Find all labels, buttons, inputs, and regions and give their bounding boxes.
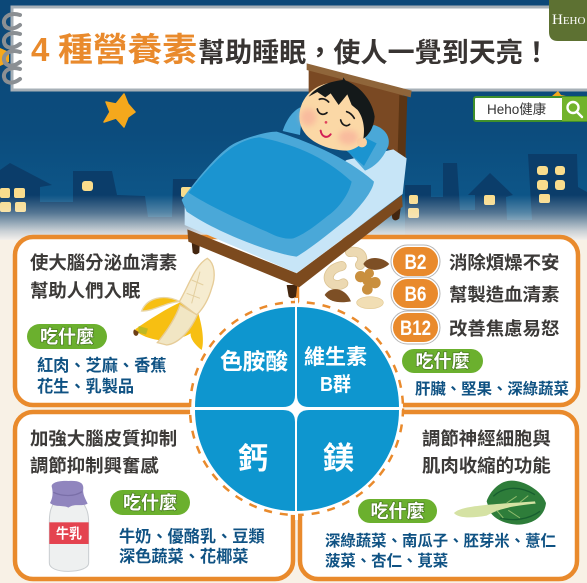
icon: milk bottle: 牛乳 <box>56 526 82 542</box>
B6 row: 幫製造血清素 <box>449 284 559 305</box>
title banner: 種營養素 <box>58 31 197 68</box>
foods: 肝臟、堅果、深綠蔬菜 <box>415 379 569 398</box>
B12 row <box>391 311 559 344</box>
search box <box>474 97 587 121</box>
white backing with dashed ring <box>190 302 403 515</box>
title text dark: 幫助睡眠，使人一覺到天亮！ <box>198 38 550 68</box>
B12 row: 改善焦慮易怒 <box>449 318 559 339</box>
title banner <box>0 7 587 90</box>
bed legs <box>191 208 401 298</box>
B12 row: B12 <box>400 317 431 340</box>
lit windows <box>0 166 565 218</box>
skyline buildings <box>0 154 587 240</box>
panel: tryptophan <box>15 237 305 405</box>
search label: Heho健康 <box>487 101 546 117</box>
foods: 深綠蔬菜、南瓜子、胚芽米、薏仁 <box>325 531 556 550</box>
night sky with skyline <box>0 0 587 240</box>
what to eat pill <box>110 490 190 515</box>
quadrant: calcium <box>195 410 295 511</box>
what to eat pill: 吃什麼 <box>123 492 177 513</box>
eyes and mouth <box>317 99 354 126</box>
panel: tryptophan: 花生、乳製品 <box>37 377 134 396</box>
cheeks <box>300 109 358 145</box>
logo badge: Heho <box>552 12 585 28</box>
quadrant: tryptophan <box>195 307 295 407</box>
panel: magnesium: 肌肉收縮的功能 <box>422 455 551 476</box>
peanut <box>357 297 383 309</box>
what to eat pill <box>402 349 483 373</box>
icon: magnifier <box>568 102 582 117</box>
icon: nuts <box>325 252 389 309</box>
notebook rings <box>4 14 20 83</box>
what to eat pill <box>358 499 437 523</box>
what to eat pill <box>27 324 107 349</box>
panel: magnesium: 菠菜、杏仁、莧菜 <box>325 552 448 570</box>
logo badge <box>549 0 587 41</box>
panel: vitamin B <box>297 237 578 405</box>
description: 使大腦分泌血清素 <box>30 252 177 273</box>
B6 row <box>391 277 559 310</box>
B2 row: 消除煩燥不安 <box>449 252 559 273</box>
foods: 牛奶、優酪乳、豆類 <box>119 527 265 546</box>
hair <box>309 77 375 139</box>
face <box>299 83 368 151</box>
frame <box>187 195 403 287</box>
blanket <box>182 132 374 257</box>
quadrant: magnesium: 鎂 <box>323 441 354 476</box>
quadrant: magnesium <box>297 410 399 511</box>
B2 row <box>391 245 559 278</box>
foods: 紅肉、芝麻、香蕉 <box>37 356 166 375</box>
mattress <box>185 149 407 273</box>
panel: tryptophan: 幫助人們入眠 <box>30 280 141 301</box>
central circle <box>190 298 403 520</box>
title text orange: 4 <box>31 31 50 68</box>
icon: leafy green <box>454 481 546 525</box>
pillow <box>283 107 303 135</box>
banner card <box>12 7 587 90</box>
icon: small star behind search box <box>552 91 566 96</box>
quadrant: vitamin B: 維生素 <box>304 346 367 369</box>
icon: star <box>104 94 135 127</box>
quadrant: calcium: 鈣 <box>238 443 268 476</box>
what to eat pill: 吃什麼 <box>40 326 94 347</box>
panel: calcium: 深色蔬菜、花椰菜 <box>119 547 248 566</box>
panel: calcium <box>15 412 293 579</box>
description: 調節神經細胞與 <box>422 428 551 449</box>
B2 row: B2 <box>404 251 426 274</box>
walnut <box>355 269 381 295</box>
icon: star behind rings <box>0 48 9 66</box>
illustration: sleeping child in bed <box>182 63 412 298</box>
cashews <box>350 252 362 265</box>
almonds <box>363 258 389 270</box>
B6 row: B6 <box>404 283 426 306</box>
panel: magnesium <box>300 412 577 579</box>
headboard <box>309 70 406 160</box>
what to eat pill: 吃什麼 <box>370 500 424 522</box>
description: 加強大腦皮質抑制 <box>30 428 177 449</box>
icon: banana <box>133 258 214 350</box>
horizon fade <box>0 195 587 240</box>
panel: calcium: 調節抑制興奮感 <box>30 455 159 476</box>
quadrant: vitamin B: B群 <box>320 373 351 396</box>
quadrant: tryptophan: 色胺酸 <box>220 348 288 374</box>
icon: milk bottle <box>49 481 89 571</box>
quadrant: vitamin B <box>297 307 399 407</box>
what to eat pill: 吃什麼 <box>416 350 470 372</box>
